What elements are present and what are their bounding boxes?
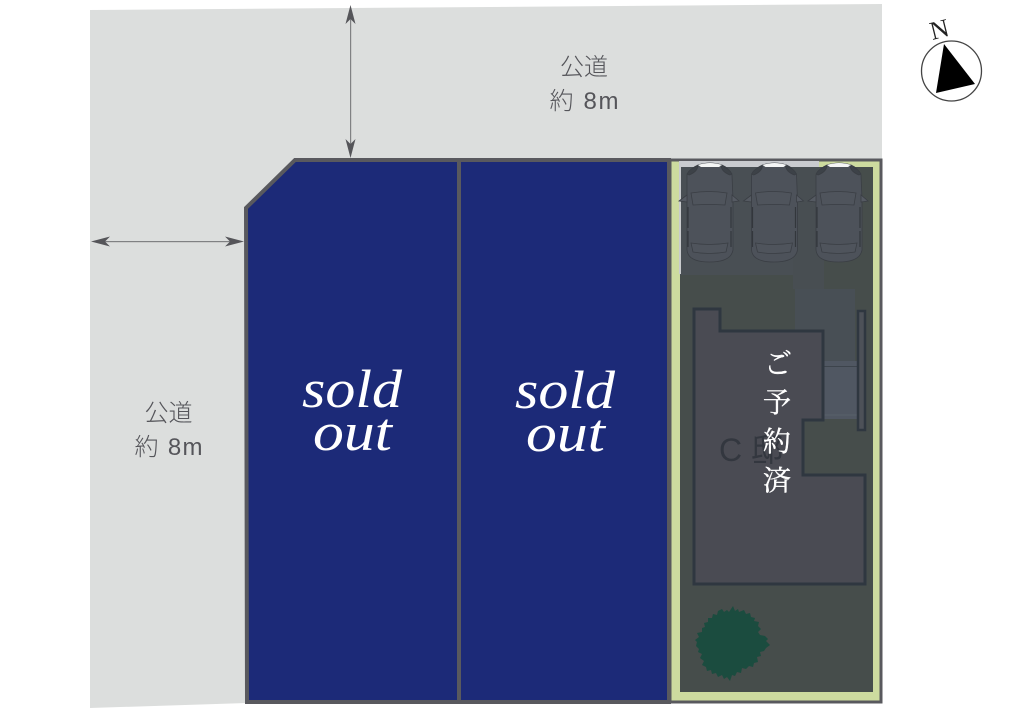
road label: left: 約 8m [134,434,202,461]
car 1 [679,163,739,262]
arrow: left road width [91,236,244,246]
lot A: sold out: sold [302,359,403,419]
arrow: top road width [346,5,356,158]
road label: left: 公道 [144,400,192,427]
lot A: sold out: out [313,402,394,462]
compass: north indicator: N [927,13,952,46]
road label: left [134,400,202,461]
house label: C 邸 [719,432,783,468]
parking pad [679,161,855,361]
road label: top [550,54,618,115]
road label: top: 公道 [560,54,608,81]
entrance porch [824,361,858,419]
compass: north indicator [922,13,982,101]
car 3 [808,163,868,262]
side fence [858,311,865,430]
lot B: sold out: sold [515,360,616,420]
reserved label [763,349,792,497]
reserved label: 済 [763,465,791,497]
lot A: sold out [246,160,459,702]
lot C: reserved [670,160,881,702]
public road area [90,4,882,708]
icon: tree [695,606,770,681]
road label: top: 約 8m [550,88,618,115]
lot B: sold out: out [526,403,607,463]
reserved label: 約 [763,426,791,458]
reserved label: 予 [763,388,791,419]
reserved label: ご [764,349,792,380]
house footprint [694,309,865,584]
car 2 [744,163,804,262]
lot B: sold out [459,160,669,702]
